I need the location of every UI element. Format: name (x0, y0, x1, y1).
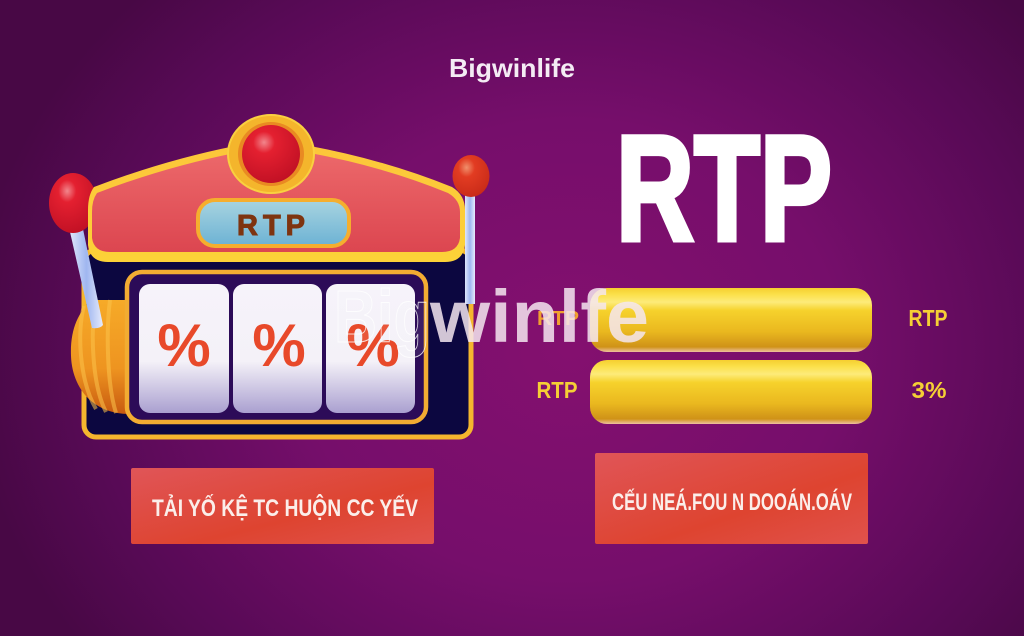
RTP sign: RTP (237, 210, 310, 242)
roof (88, 146, 465, 262)
reel frame (127, 272, 426, 422)
bar: top (590, 288, 872, 352)
reel 2 (233, 284, 322, 413)
brand heading: Bigwinlife (449, 53, 575, 83)
top ball (228, 115, 314, 193)
reel 3 (326, 284, 415, 413)
slot machine illustration (49, 115, 490, 437)
machine body (84, 250, 471, 437)
watermark: Big (334, 275, 430, 358)
watermark (334, 275, 649, 358)
label: top bar left: RTP (537, 308, 579, 330)
button: left (131, 468, 434, 544)
side drum (71, 300, 130, 414)
label: top bar right: RTP (908, 305, 948, 331)
reel 3: % (346, 312, 400, 379)
main RTP heading: RTP (616, 104, 832, 272)
label: bottom bar right: 3% (912, 377, 946, 403)
watermark: winlfe (429, 275, 649, 358)
reel 1 (139, 284, 229, 413)
bar: bottom (590, 360, 872, 424)
label: bottom bar left: RTP (536, 377, 578, 403)
reel 2: % (252, 312, 306, 379)
RTP sign (198, 200, 349, 246)
reel 1: % (157, 312, 211, 379)
button: right (595, 453, 868, 544)
right lever (452, 155, 490, 304)
left lever (49, 173, 103, 328)
button: right: CẾU NEÁ.FOU N DOOÁN.OÁV (612, 488, 852, 516)
button: left: TẢI YỐ KỆ TC HUỘN CC YẾV (152, 493, 418, 522)
